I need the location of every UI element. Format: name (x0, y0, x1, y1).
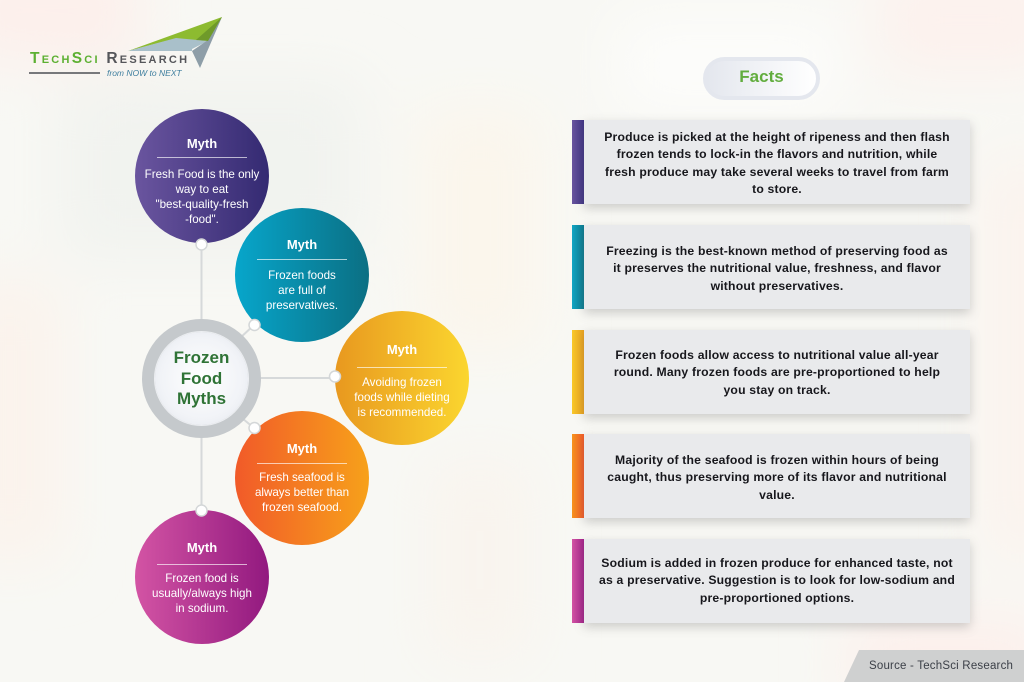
heading: Myth (287, 237, 317, 252)
text: without preservatives. (711, 279, 843, 293)
logo tagline: from NOW to NEXT (107, 68, 182, 78)
text: Produce is picked at the height of ripeness and then flash (604, 130, 950, 144)
fact 3 (572, 329, 975, 423)
heading: Myth (187, 540, 217, 555)
text: always better than (255, 486, 349, 499)
myth circle: magenta (135, 510, 269, 644)
myth circle: orange (235, 411, 369, 545)
fact 4 (572, 433, 975, 527)
source tag: Source - TechSci Research (869, 660, 1013, 672)
fact 1 (572, 119, 975, 213)
text (354, 376, 450, 419)
text: Majority of the seafood is frozen within hours of being (615, 453, 939, 467)
text: Fresh Food is the only (145, 168, 259, 181)
hub title: Food (181, 368, 222, 388)
text (145, 168, 260, 226)
hub title (174, 348, 229, 408)
heading: Myth (287, 441, 317, 456)
center hub: Frozen Food Myths (142, 319, 261, 438)
text: frozen seafood. (262, 501, 342, 514)
text: it preserves the nutritional value, freshness, and flavor (613, 261, 941, 275)
text: round. Many frozen foods are pre-proportioned to help (614, 365, 940, 379)
fact 5 (572, 538, 975, 632)
hub title: Frozen (174, 348, 229, 367)
text: usually/always high (152, 587, 252, 600)
source tag (844, 650, 1024, 682)
hub title: Myths (177, 389, 226, 408)
heading: Myth (387, 342, 417, 357)
text: frozen tends to lock-in the flavors and nutrition, while (617, 147, 937, 161)
myth circle: yellow (335, 311, 469, 445)
text: foods while dieting (354, 391, 450, 404)
logo rule (29, 72, 100, 74)
text: way to eat (176, 183, 228, 196)
text: Sodium is added in frozen produce for enhanced taste, not (601, 556, 953, 570)
text: are full of (278, 284, 326, 297)
text (255, 471, 349, 514)
text (266, 269, 338, 312)
text: in sodium. (176, 602, 228, 615)
text: fresh produce may take several weeks to travel from farm (605, 165, 949, 179)
Facts heading pill (703, 57, 820, 100)
text: caught, thus preserving more of its flavor and nutritional (607, 470, 947, 484)
Facts heading pill: Facts (739, 67, 784, 86)
logo: TechSci Research (29, 17, 222, 78)
text (152, 572, 252, 615)
text: as a preservative. Suggestion is to look for low-sodium and (599, 573, 955, 587)
text: pre-proportioned options. (700, 591, 854, 605)
text: "best-quality-fresh (155, 198, 249, 211)
text: preservatives. (266, 299, 338, 312)
text: Frozen food is (165, 572, 239, 585)
text: Fresh seafood is (259, 471, 345, 484)
logo wordmark: TechSci Research (30, 50, 189, 67)
text: value. (759, 488, 795, 502)
myth circle: purple (135, 109, 269, 243)
text: is recommended. (358, 406, 446, 419)
heading: Myth (187, 136, 217, 151)
text: Frozen foods (268, 269, 336, 282)
icon: logo arrow (128, 17, 222, 68)
text: Freezing is the best-known method of preserving food as (606, 244, 948, 258)
fact 2 (572, 224, 975, 318)
text: -food". (185, 213, 219, 226)
text: Frozen foods allow access to nutritional value all-year (615, 348, 939, 362)
text: you stay on track. (723, 383, 831, 397)
text: to store. (752, 182, 802, 196)
text: Avoiding frozen (362, 376, 442, 389)
myth circle: teal (235, 208, 369, 342)
